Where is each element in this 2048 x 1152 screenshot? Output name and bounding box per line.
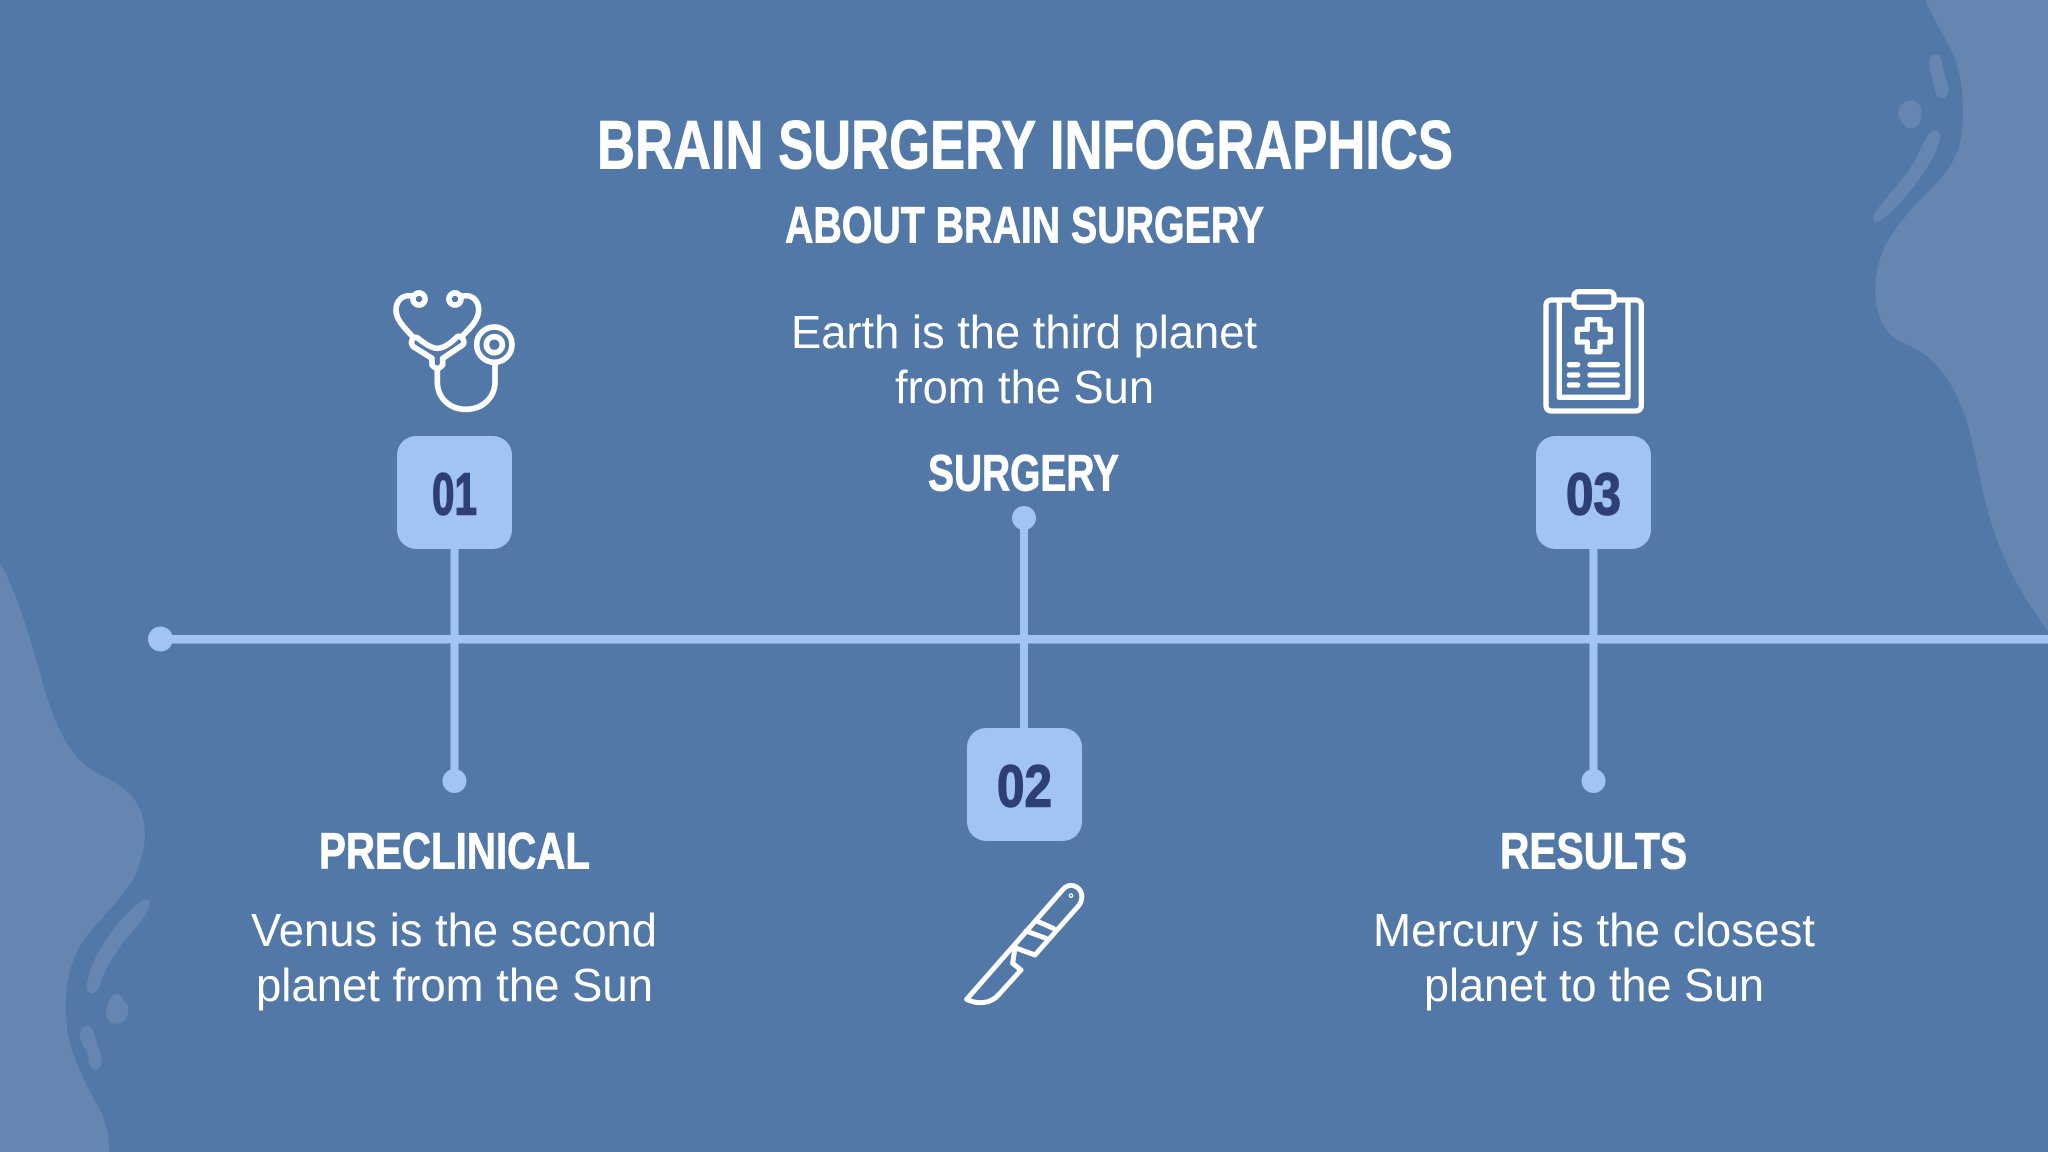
heading: results: RESULTS [1500,822,1687,880]
text: venus: Venus is the second [251,904,657,956]
step 02: surgery [791,306,1257,1003]
text: venus: planet from the Sun [256,959,653,1011]
step 03: results [1373,292,1815,1011]
icon: stethoscope [396,293,512,409]
subtitle: ABOUT BRAIN SURGERY [785,196,1264,254]
connector 03 [1582,549,1606,793]
text: venus [251,904,657,1011]
connector 02 [1012,506,1036,728]
text: mercury: Mercury is the closest [1373,904,1815,956]
heading: surgery: SURGERY [928,444,1119,502]
background blob: bottom left [0,563,150,1152]
icon: medical clipboard [1546,292,1641,411]
step 01: preclinical [251,293,657,1011]
number card 02: 02 [997,754,1052,820]
number card 03: 03 [1566,462,1621,528]
text: earth [791,306,1257,413]
background blob: top right [1873,0,2048,631]
icon: scalpel [967,885,1082,1003]
text: mercury: planet to the Sun [1424,959,1764,1011]
title: BRAIN SURGERY INFOGRAPHICS [597,106,1453,184]
text: earth: from the Sun [895,361,1154,413]
connector 01 [442,549,466,793]
text: mercury [1373,904,1815,1011]
number card 01: 01 [432,462,477,528]
timeline [148,626,2048,652]
heading: preclinical: PRECLINICAL [319,822,590,880]
number card 01 [397,436,512,549]
number card 02 [967,728,1082,841]
number card 03 [1536,436,1651,549]
text: earth: Earth is the third planet [791,306,1257,358]
